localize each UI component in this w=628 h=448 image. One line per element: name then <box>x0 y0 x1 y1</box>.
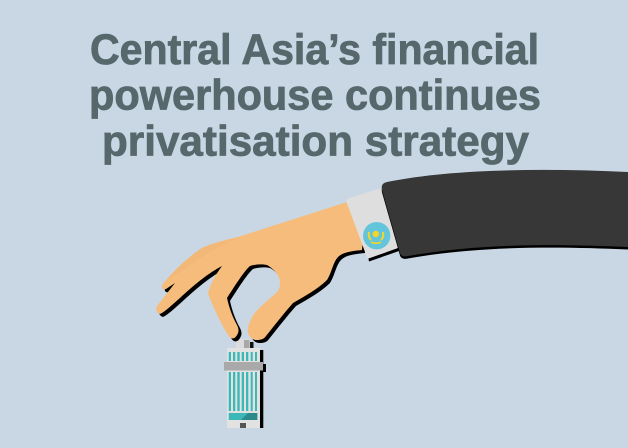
cuff shadow <box>368 246 399 262</box>
icon: shirt cuff <box>346 188 399 262</box>
building sign <box>229 413 257 420</box>
title: privatisation strategy <box>102 118 529 166</box>
sleeve shadow <box>382 172 628 259</box>
hand shadow <box>159 205 365 343</box>
icon: Kazakhstan flag badge <box>363 222 390 249</box>
building band <box>224 362 263 370</box>
cuff fill <box>346 188 398 258</box>
icon: hand <box>156 202 365 343</box>
sleeve fill <box>382 170 628 256</box>
building cap <box>236 339 250 348</box>
icon: dark suit sleeve <box>382 170 628 259</box>
building shadow <box>259 350 266 428</box>
title: Central Asia’s financial <box>90 26 539 74</box>
lower windows <box>229 372 257 411</box>
icon: building held by the hand <box>224 339 266 428</box>
hand fill <box>156 202 365 340</box>
finger crease <box>168 237 238 280</box>
title: powerhouse continues <box>89 72 541 120</box>
building door <box>240 423 246 428</box>
title <box>89 26 541 166</box>
upper windows <box>229 352 257 361</box>
building body <box>227 348 260 428</box>
